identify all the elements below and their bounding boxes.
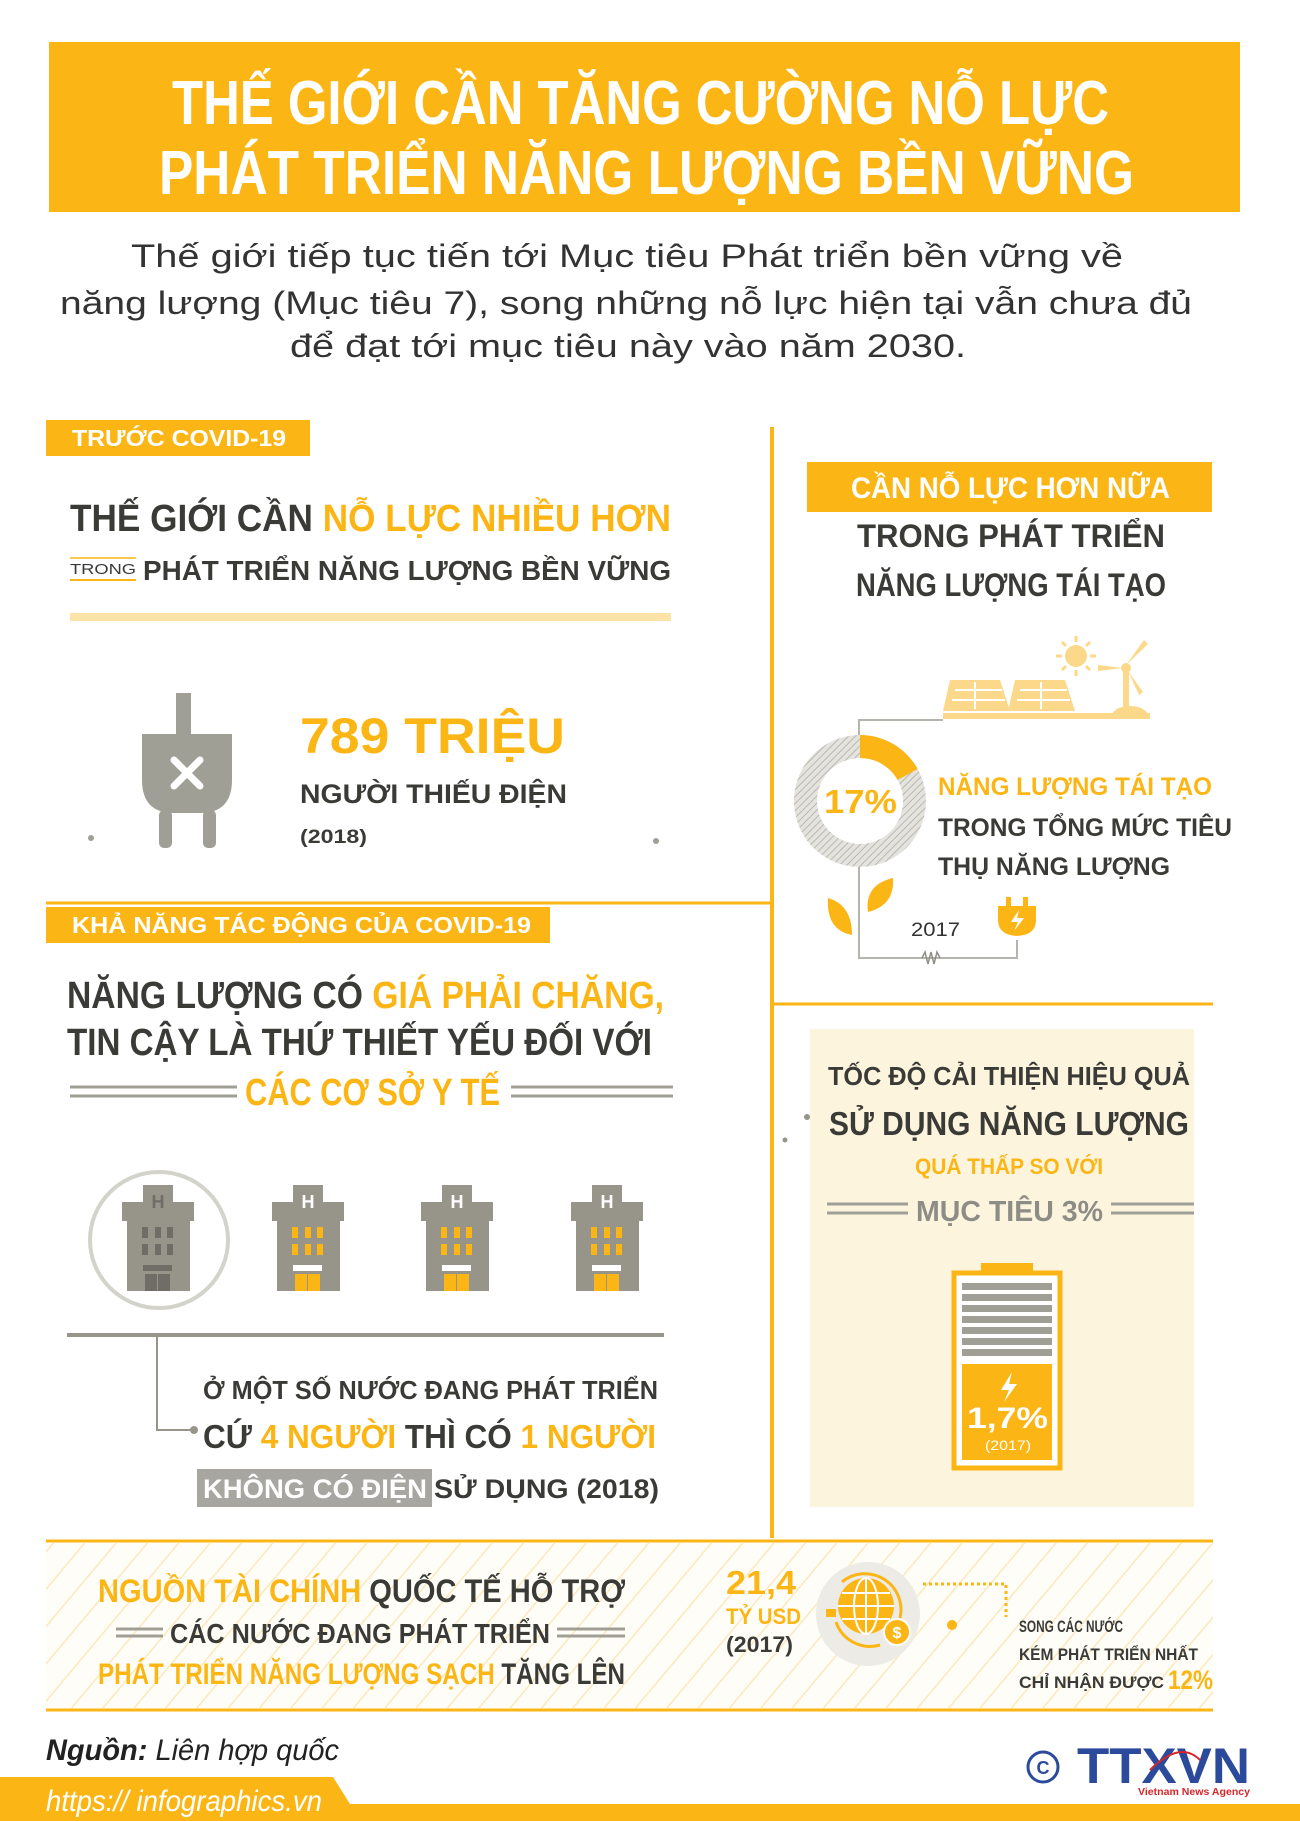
stat: 789 triệu [300, 708, 567, 848]
subtitle: để đạt tới mục tiêu này vào năm 2030. [290, 328, 966, 364]
icon: unplugged plug [88, 693, 659, 848]
icon: battery 1,7% [954, 1263, 1060, 1468]
stat: 21,4 tỷ usd [726, 1564, 801, 1657]
dotted connector [923, 1584, 1006, 1630]
label: cần nỗ lực hơn nữa: CẦN NỖ LỰC HƠN NỮA [851, 471, 1170, 505]
panel: efficiency [782, 1029, 1194, 1507]
stat: 789 triệu: (2018) [300, 827, 367, 848]
icons: hospitals: H [600, 1192, 614, 1212]
donut chart: 17%: 17% [824, 783, 897, 820]
heading: cần nỗ lực nhiều hơn: PHÁT TRIỂN NĂNG LƯỢNG BỀN VỮNG [143, 555, 671, 586]
panel: efficiency: MỤC TIÊU 3% [916, 1194, 1103, 1228]
text: 1 in 4 without electricity: KHÔNG CÓ ĐIỆN [203, 1473, 427, 1504]
panel: international finance: CÁC NƯỚC ĐANG PHÁT TRIỂN [170, 1618, 550, 1649]
icon: solar panels, sun, wind turbine [943, 636, 1150, 719]
label: khả năng tác động [46, 907, 550, 943]
logo: TTXVN [1028, 1738, 1250, 1798]
panel: efficiency: QUÁ THẤP SO VỚI [915, 1154, 1103, 1179]
text: renewable share: TRONG TỔNG MỨC TIÊU [938, 812, 1232, 842]
icon: battery 1,7%: 1,7% [967, 1402, 1048, 1435]
heading: cần nỗ lực nhiều hơn [70, 495, 671, 621]
icons: hospitals: H [450, 1192, 464, 1212]
donut chart: 17% [794, 720, 943, 867]
dividers [46, 427, 1213, 1538]
icons: hospitals: H [302, 1192, 314, 1212]
icon: globe with coin [816, 1562, 920, 1666]
stat: 789 triệu: NGƯỜI THIẾU ĐIỆN [300, 778, 567, 809]
connector line [67, 1335, 664, 1434]
heading: cần nỗ lực nhiều hơn: THẾ GIỚI CẦN NỖ LỰC NHIỀU HƠN [70, 495, 671, 540]
heading: năng lượng giá phải chăng: NĂNG LƯỢNG CÓ GIÁ PHẢI CHĂNG, [67, 973, 664, 1017]
panel: efficiency: SỬ DỤNG NĂNG LƯỢNG [829, 1105, 1189, 1142]
stat: 21,4 tỷ usd: 21,4 [726, 1564, 797, 1601]
heading: cần nỗ lực nhiều hơn: TRONG [70, 561, 136, 578]
text: renewable share: THỤ NĂNG LƯỢNG [938, 852, 1170, 881]
icon: battery 1,7%: (2017) [985, 1437, 1031, 1453]
text: renewable share [938, 772, 1232, 881]
panel: international finance: NGUỒN TÀI CHÍNH QUỐC TẾ HỖ TRỢ [98, 1573, 626, 1609]
label: cần nỗ lực hơn nữa: NĂNG LƯỢNG TÁI TẠO [856, 567, 1166, 603]
label: cần nỗ lực hơn nữa: TRONG PHÁT TRIỂN [857, 518, 1165, 554]
label: khả năng tác động: KHẢ NĂNG TÁC ĐỘNG CỦA COVID-19 [72, 910, 531, 938]
text: 1 in 4 without electricity: Ở MỘT SỐ NƯỚC ĐANG PHÁT TRIỂN [203, 1374, 658, 1405]
logo: TTXVN: Vietnam News Agency [1138, 1787, 1250, 1798]
stat: 21,4 tỷ usd: TỶ USD [726, 1604, 801, 1629]
icons: hospitals: H [152, 1192, 164, 1212]
logo: TTXVN: C [1036, 1758, 1050, 1778]
label: trước covid-19 [46, 420, 310, 456]
title [49, 42, 1240, 212]
text: least developed 12%: KÉM PHÁT TRIỂN NHẤT [1019, 1645, 1199, 1664]
text: least developed 12%: CHỈ NHẬN ĐƯỢC [1019, 1673, 1164, 1692]
heading: năng lượng giá phải chăng: TIN CẬY LÀ THỨ THIẾT YẾU ĐỐI VỚI [67, 1019, 652, 1064]
subtitle: năng lượng (Mục tiêu 7), song những nỗ lực hiện tại vẫn chưa đủ [60, 285, 1192, 321]
subtitle [60, 238, 1192, 364]
title: THẾ GIỚI CẦN TĂNG CƯỜNG NỖ LỰC [172, 69, 1109, 138]
stat: 21,4 tỷ usd: (2017) [726, 1632, 793, 1657]
text: least developed 12%: SONG CÁC NƯỚC [1019, 1617, 1123, 1636]
footer bar with url: https:// infographics.vn [46, 1785, 322, 1818]
panel: international finance [46, 1541, 1213, 1710]
logo: TTXVN: TTXVN [1077, 1738, 1250, 1794]
source: Nguồn: Liên hợp quốc [46, 1734, 339, 1767]
heading: năng lượng giá phải chăng [67, 973, 673, 1114]
text: least developed 12%: 12% [1168, 1665, 1213, 1695]
text: 1 in 4 without electricity: SỬ DỤNG (2018) [434, 1472, 659, 1504]
label: cần nỗ lực hơn nữa [807, 462, 1212, 603]
panel: international finance: PHÁT TRIỂN NĂNG LƯỢNG SẠCH TĂNG LÊN [98, 1657, 625, 1691]
panel: efficiency: TỐC ĐỘ CẢI THIỆN HIỆU QUẢ [828, 1061, 1190, 1091]
icon: globe with coin: $ [893, 1625, 902, 1642]
text: least developed 12% [1019, 1617, 1213, 1695]
subtitle: Thế giới tiếp tục tiến tới Mục tiêu Phát triển bền vững về [131, 238, 1123, 274]
label: trước covid-19: TRƯỚC COVID-19 [72, 424, 286, 451]
text: 1 in 4 without electricity: CỨ 4 NGƯỜI THÌ CÓ 1 NGƯỜI [203, 1418, 656, 1455]
icons: hospitals [90, 1172, 643, 1308]
title: PHÁT TRIỂN NĂNG LƯỢNG BỀN VỮNG [159, 139, 1134, 208]
footer bar with url [0, 1777, 1300, 1821]
circuit with leaves and plug [828, 867, 1036, 964]
stat: 789 triệu: 789 TRIỆU [300, 708, 565, 764]
text: renewable share: NĂNG LƯỢNG TÁI TẠO [938, 772, 1212, 801]
circuit with leaves and plug: 2017 [911, 920, 960, 941]
heading: năng lượng giá phải chăng: CÁC CƠ SỞ Y TẾ [245, 1070, 500, 1114]
text: 1 in 4 without electricity [197, 1374, 659, 1507]
